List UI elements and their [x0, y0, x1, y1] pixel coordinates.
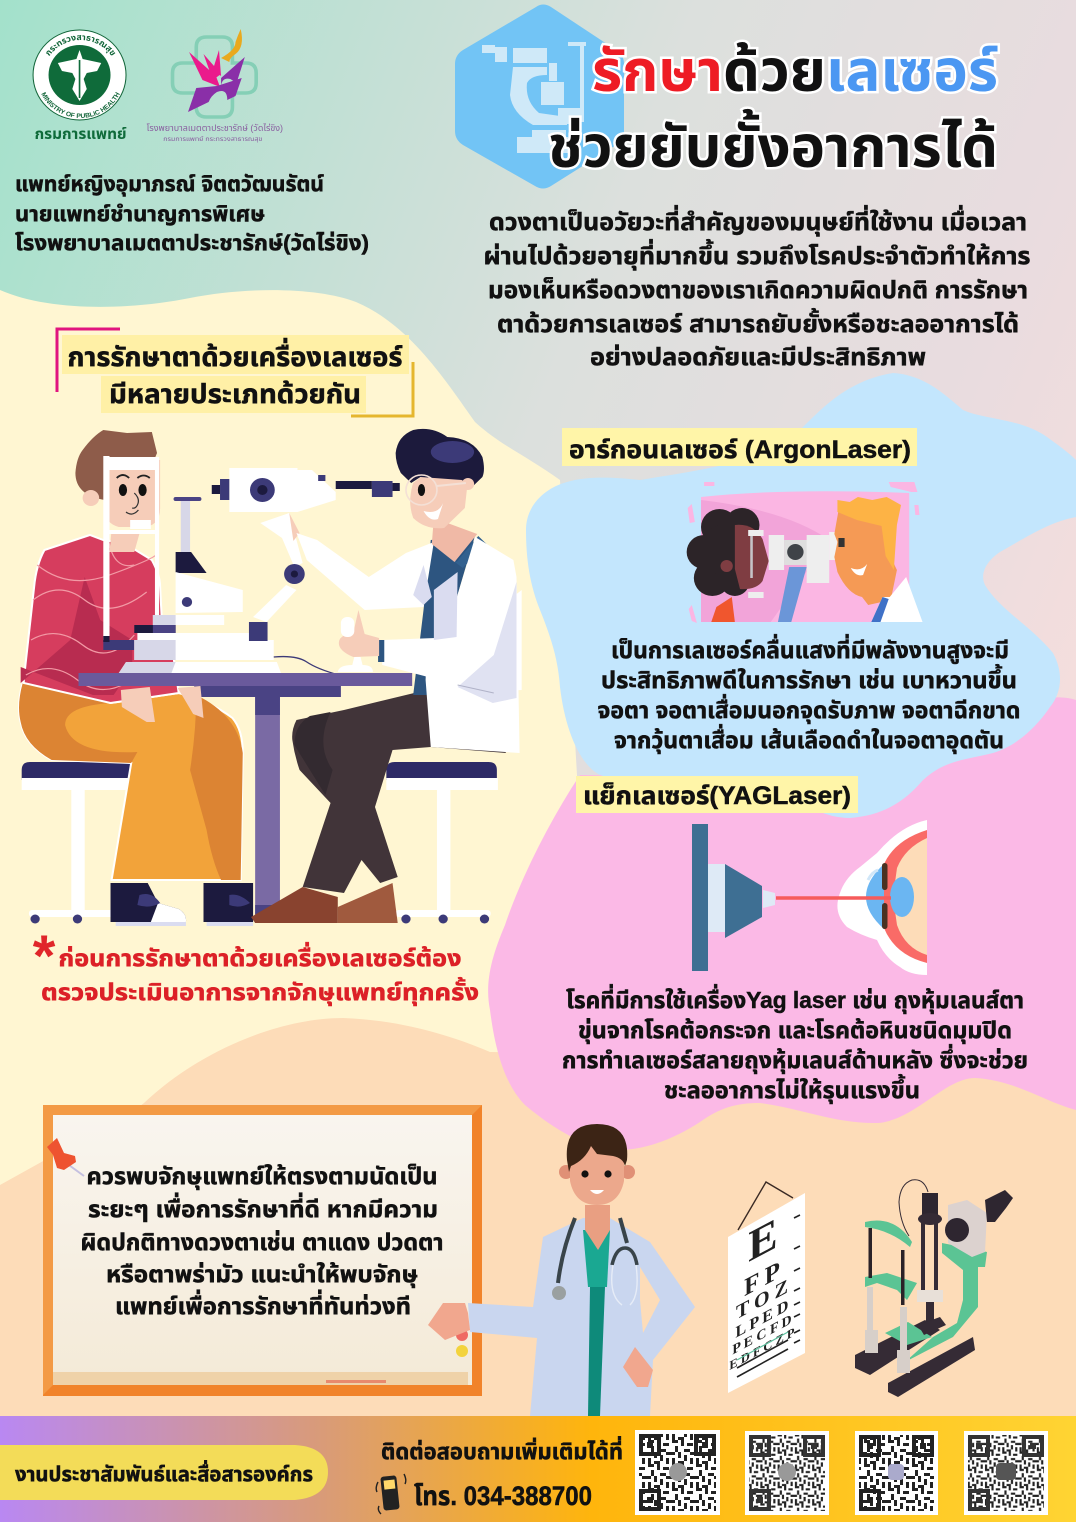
label: argon laser: อาร์กอนเลเซอร์ (ArgonLaser): [569, 436, 911, 464]
heading: laser types: มีหลายประเภทด้วยกัน: [109, 379, 361, 409]
text: introduction: ดวงตาเป็นอวัยวะที่สำคัญของมนุษย์ที่ใช้งาน เมื่อเวลา: [489, 205, 1027, 237]
text: argon description: เป็นการเลเซอร์คลื่นแสงที่มีพลังงานสูงจะมี: [611, 634, 1009, 664]
patient hands: [121, 687, 155, 722]
text: argon description: จอตา จอตาเสื่อมนอกจุดรับภาพ จอตาฉีกขาด: [598, 694, 1020, 724]
illustration: yag laser to eye: [692, 820, 927, 975]
chin rest: [103, 456, 109, 640]
note: warning: *: [33, 924, 56, 989]
label: argon laser: [562, 428, 917, 466]
heading: laser types: [57, 329, 413, 416]
text: yag description: ขุ่นจากโรคต้อกระจก และโรคต้อหินชนิดมุมปิด: [578, 1017, 1012, 1044]
text: argon description: จากวุ้นตาเสื่อม เส้นเลือดดำในจอตาอุดตัน: [614, 724, 1004, 754]
panel: cream background: [0, 290, 620, 1522]
doctor hand: [339, 610, 379, 657]
text: contact: โทร. 034-388700: [414, 1481, 592, 1511]
patient legs: [19, 683, 243, 880]
qr code 2: [745, 1431, 829, 1515]
stools: [22, 762, 132, 780]
logo: ministry of public health: MINISTRY OF PUBLIC HEALTH: [41, 92, 120, 118]
patient head: [109, 530, 140, 552]
table top: [79, 673, 412, 686]
panel: notice board: หรือตาพร่ามัว แนะนำให้พบจักษุ: [106, 1261, 418, 1288]
doctor shoes: [251, 887, 338, 923]
panel: argon laser blue blob: [526, 373, 1076, 818]
qr code 3: [855, 1431, 938, 1515]
logo: ministry of public health: กระทรวงสาธารณสุข: [46, 35, 116, 56]
note: warning: ตรวจประเมินอาการจากจักษุแพทย์ทุกครั้ง: [41, 977, 479, 1006]
illustration: eye chart: P E C F D: [732, 1312, 792, 1358]
panel: notice board: [43, 1105, 482, 1396]
illustration: woman doctor: [428, 1124, 695, 1416]
text: yag description: โรคที่มีการใช้เครื่องYag laser เช่น ถุงหุ้มเลนส์ตา: [566, 984, 1024, 1014]
text: argon description: ประสิทธิภาพดีในการรักษา เช่น เบาหวานขึ้น: [601, 664, 1017, 693]
panel: notice board: แพทย์เพื่อการรักษาที่ทันท่วงที: [115, 1289, 411, 1319]
panel: notice board: ควรพบจักษุแพทย์ให้ตรงตามนัดเป็น: [86, 1163, 438, 1190]
label: yag laser: [576, 776, 858, 813]
text: author: แพทย์หญิงอุมาภรณ์ จิตตวัฒนรัตน์: [15, 172, 324, 197]
illustration: eye chart: T O Z: [736, 1274, 788, 1324]
text: yag description: ชะลออาการไม่ให้รุนแรงขึ้น: [664, 1074, 920, 1104]
text: introduction: ตาด้วยการเลเซอร์ สามารถยับยั้งหรือชะลออาการได้: [497, 308, 1019, 338]
qr code 1: [635, 1430, 720, 1515]
logo: hospital: โรงพยาบาลเมตตาประชารักษ์ (วัดไร่ขิง): [147, 123, 283, 133]
logo: hospital: กรมการแพทย์ กระทรวงสาธารณสุข: [163, 135, 262, 144]
illustration: eye chart: F P: [744, 1255, 780, 1302]
table leg: [255, 696, 280, 914]
text: introduction: ผ่านไปด้วยอายุที่มากขึ้น รวมถึงโรคประจำตัวทำให้การ: [484, 239, 1030, 271]
text: yag description: การทำเลเซอร์สลายถุงหุ้มเลนส์ด้านหลัง ซึ่งจะช่วย: [562, 1044, 1028, 1074]
panel: notice board: ระยะๆ เพื่อการรักษาที่ดี หากมีความ: [88, 1192, 438, 1222]
text: contact: [381, 1436, 623, 1511]
text: introduction: [484, 205, 1030, 371]
patient shoes: [111, 883, 186, 922]
text: author: โรงพยาบาลเมตตาประชารักษ์(วัดไร่ขิง): [15, 231, 369, 255]
note: warning: ก่อนการรักษาตาด้วยเครื่องเลเซอร์ต้อง: [58, 942, 461, 971]
doctor hands: [428, 1303, 470, 1340]
qr code 4: [964, 1431, 1048, 1515]
doctor coat: [296, 533, 434, 610]
slit lamp: [174, 497, 201, 501]
icon: blue hexagon with slit lamp: [455, 4, 624, 188]
pill: public relations: [0, 1445, 328, 1500]
text: introduction: มองเห็นหรือดวงตาของเราเกิดความผิดปกติ การรักษา: [488, 277, 1028, 304]
logo: ministry of public health: กรมการแพทย์: [35, 126, 127, 143]
text: author: นายแพทย์ชำนาญการพิเศษ: [15, 202, 265, 226]
doctor shirt: [413, 535, 475, 695]
title: รักษาด้วยเลเซอร์: [592, 39, 998, 104]
illustration: eye exam: [19, 429, 522, 926]
icon: phone: [376, 1474, 406, 1514]
label: yag laser: แย็กเลเซอร์(YAGLaser): [583, 782, 851, 810]
heading: laser types: การรักษาตาด้วยเครื่องเลเซอร์: [68, 338, 403, 372]
pill: public relations: งานประชาสัมพันธ์และสื่อสารองค์กร: [15, 1460, 313, 1486]
doctor trousers: [292, 690, 506, 893]
panel: footer: [0, 1416, 1076, 1522]
panel: yag laser pink blob: [488, 697, 1076, 1150]
logo: hospital: [147, 29, 283, 144]
illustration: eye chart: [728, 1182, 805, 1393]
title: ช่วยยับยั้งอาการได้: [548, 108, 998, 180]
patient sweater: [24, 535, 179, 703]
panel: peach background: [0, 1018, 1076, 1416]
text: contact: ติดต่อสอบถามเพิ่มเติมได้ที่: [381, 1436, 623, 1464]
illustration: slit lamp: [855, 1180, 1013, 1397]
illustration: argon eye exam: [687, 482, 923, 623]
panel: notice board: ผิดปกติทางดวงตาเช่น ตาแดง ปวดตา: [80, 1229, 444, 1255]
icon: push pin: [47, 1138, 84, 1176]
logo: ministry of public health: [32, 30, 127, 143]
illustration: eye chart: L P E D: [736, 1296, 788, 1342]
illustration: eye chart: E: [748, 1208, 778, 1272]
text: yag description: [562, 984, 1028, 1104]
text: author: [15, 172, 369, 255]
note: warning: [33, 924, 479, 1006]
title: [548, 39, 998, 180]
text: introduction: อย่างปลอดภัยและมีประสิทธิภาพ: [590, 343, 926, 371]
illustration: eye chart: E D F C Z P: [729, 1324, 795, 1373]
text: argon description: [598, 634, 1020, 754]
doctor head: [432, 518, 477, 562]
